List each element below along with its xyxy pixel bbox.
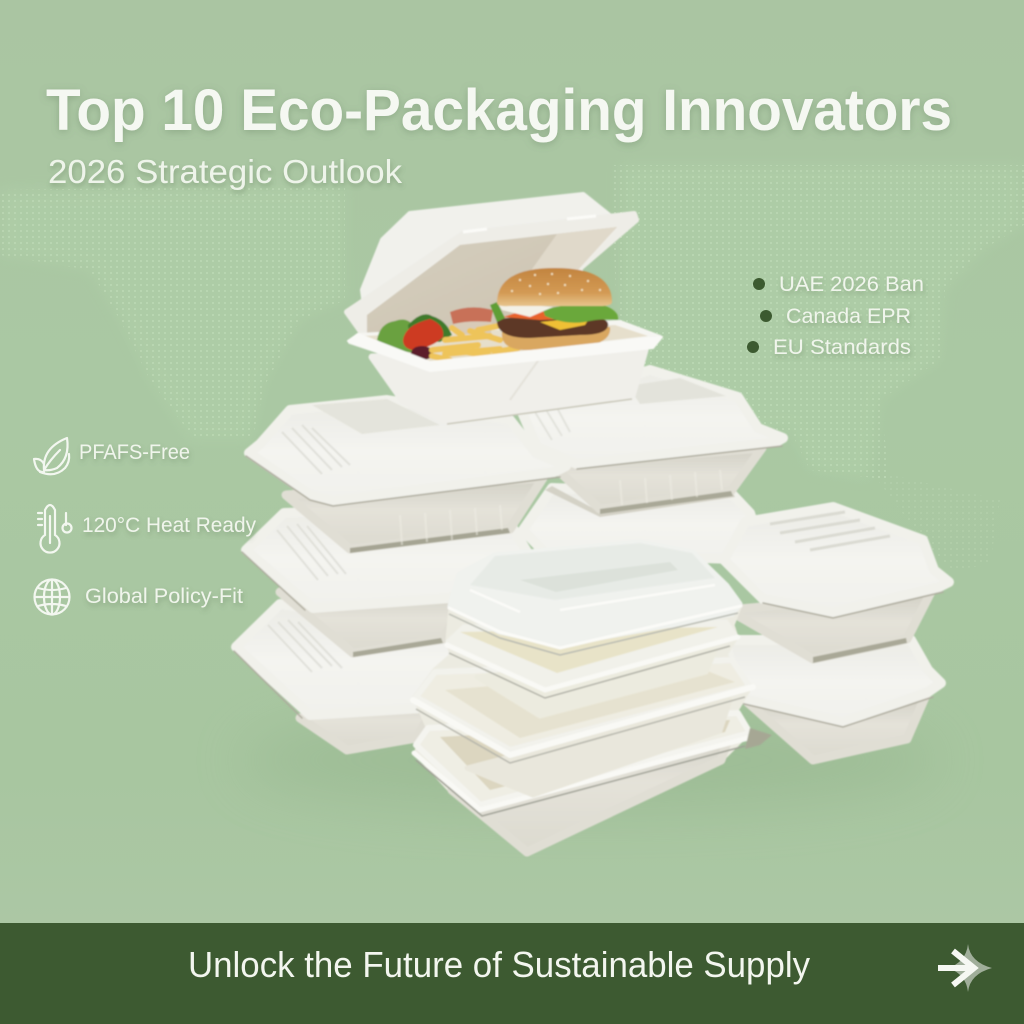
clamshell: back right lower [523, 486, 765, 560]
front rim [348, 334, 662, 371]
clamshell: right lower [725, 640, 941, 760]
policy: EU Standards: EU Standards [773, 336, 911, 359]
packaging stack illustration [234, 195, 949, 852]
icon: arrow with sparkle [938, 944, 992, 992]
tray rim back and inner [350, 322, 660, 369]
icon: thermometer [38, 505, 72, 553]
icon: globe [34, 580, 70, 614]
title: Top 10 Eco-Packaging Innovators [46, 78, 952, 143]
feature: Global Policy-Fit [34, 580, 243, 614]
stack silhouette backing [415, 543, 750, 852]
policy list [747, 273, 924, 359]
tray 3 [413, 660, 753, 795]
feature: 120°C Heat Ready [38, 505, 256, 553]
clamshell: left bottom [234, 604, 490, 750]
feature: PFAFS-Free: PFAFS-Free [79, 441, 190, 464]
clear-lid tray stack [413, 543, 772, 852]
lid interior frame [347, 214, 636, 340]
clamshell: left top [246, 399, 566, 553]
sauce cup [450, 307, 493, 335]
feature: PFAFS-Free [34, 438, 190, 474]
open clamshell with burger meal [347, 195, 662, 424]
call-to-action band [0, 923, 1024, 1024]
feature: Global Policy-Fit: Global Policy-Fit [85, 585, 243, 608]
feature: 120°C Heat Ready: 120°C Heat Ready [82, 514, 256, 537]
icon: leaf [34, 438, 69, 474]
fries [432, 326, 518, 360]
call-to-action text: Unlock the Future of Sustainable Supply [188, 944, 810, 985]
floor shadow under packaging [240, 710, 940, 810]
clamshell: left middle [242, 507, 529, 657]
lid outer back [363, 195, 620, 305]
tray 1 clear lid [449, 543, 741, 655]
lid interior beige [367, 227, 617, 340]
world map backdrop [0, 165, 1024, 570]
policy: Canada EPR: Canada EPR [786, 305, 911, 328]
policy: UAE 2026 Ban: UAE 2026 Ban [779, 273, 924, 296]
clamshell: back right upper [522, 370, 783, 514]
tray 2 [447, 622, 738, 716]
salad [377, 314, 452, 360]
clamshell: right upper [724, 507, 949, 663]
tray 4 bottom [414, 713, 772, 852]
subtitle: 2026 Strategic Outlook [48, 153, 403, 190]
base body [372, 350, 645, 421]
burger [490, 268, 618, 350]
feature list [34, 438, 256, 614]
